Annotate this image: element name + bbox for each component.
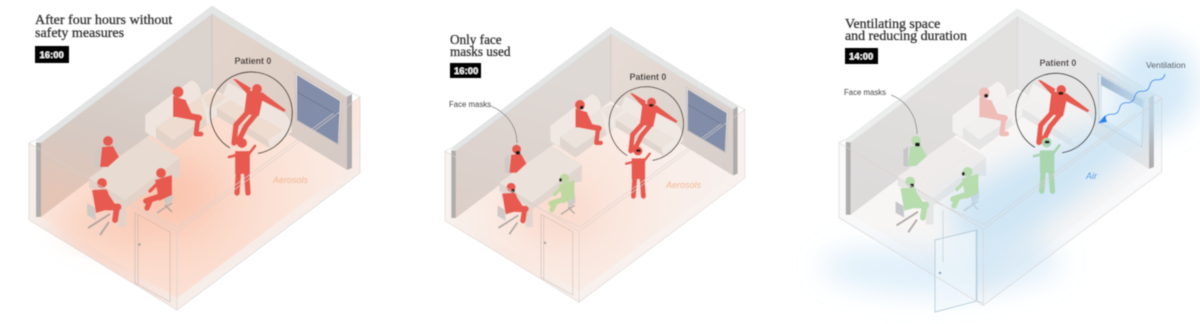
label: patient zero: Patient 0 [630, 72, 666, 82]
time badge: 16:00 [40, 50, 64, 61]
time badge [35, 46, 69, 63]
heading: After four hours without [35, 13, 172, 28]
room floor and walls [29, 6, 360, 310]
label: air: Air [1085, 171, 1098, 181]
panel: only face masks used [445, 27, 745, 302]
label: patient zero: Patient 0 [235, 56, 271, 66]
furniture: sofas, table, chairs [87, 80, 292, 235]
door [135, 213, 170, 302]
window with open frame [1098, 73, 1144, 147]
leader line to face mask [491, 106, 517, 143]
label: face masks: Face masks [844, 88, 886, 97]
leader line to face mask [891, 95, 917, 134]
figure: person at front of table [92, 178, 118, 220]
glass outline of room [445, 106, 745, 302]
figure: patient zero [233, 79, 286, 143]
panel: after four hours without safety measures [29, 6, 360, 310]
figure: person behind table [100, 136, 119, 167]
figure: person on sofa [172, 86, 201, 134]
window [295, 72, 342, 145]
time badge [450, 63, 481, 78]
open door [935, 210, 983, 312]
door [541, 214, 573, 295]
patient zero circle [1016, 73, 1096, 153]
label: patient zero: Patient 0 [1040, 58, 1076, 68]
room floor and walls [839, 9, 1162, 305]
air flow clouds [819, 40, 1197, 301]
patient zero circle [210, 72, 292, 153]
glass outline of room [839, 94, 1162, 305]
label: aerosols: Aerosols [665, 180, 702, 190]
label: face masks: Face masks [449, 100, 491, 109]
arrow: ventilation airflow [1098, 74, 1165, 124]
time badge: 14:00 [849, 52, 873, 62]
time badge [845, 48, 878, 64]
figures with face masks [900, 80, 1090, 218]
panel: ventilating space and reducing duration [819, 9, 1197, 312]
time badge: 16:00 [454, 66, 478, 77]
heading: masks used [450, 44, 511, 59]
heading: Ventilating space [845, 17, 940, 32]
patient zero circle [609, 87, 684, 160]
figures with face masks [502, 93, 678, 221]
furniture: sofas, table, chairs [498, 94, 683, 234]
figure: person at end of table [146, 168, 172, 208]
glass outline of room [29, 93, 360, 310]
room floor and walls [445, 27, 745, 302]
label: ventilation: Ventilation [1146, 60, 1186, 70]
heading: and reducing duration [845, 29, 967, 44]
figure: standing person [229, 138, 255, 193]
heading: Only face [450, 32, 502, 47]
label: aerosols: Aerosols [272, 175, 309, 185]
furniture: sofas, table, chairs [896, 81, 1095, 232]
heading: safety measures [35, 26, 124, 41]
window [686, 87, 729, 153]
